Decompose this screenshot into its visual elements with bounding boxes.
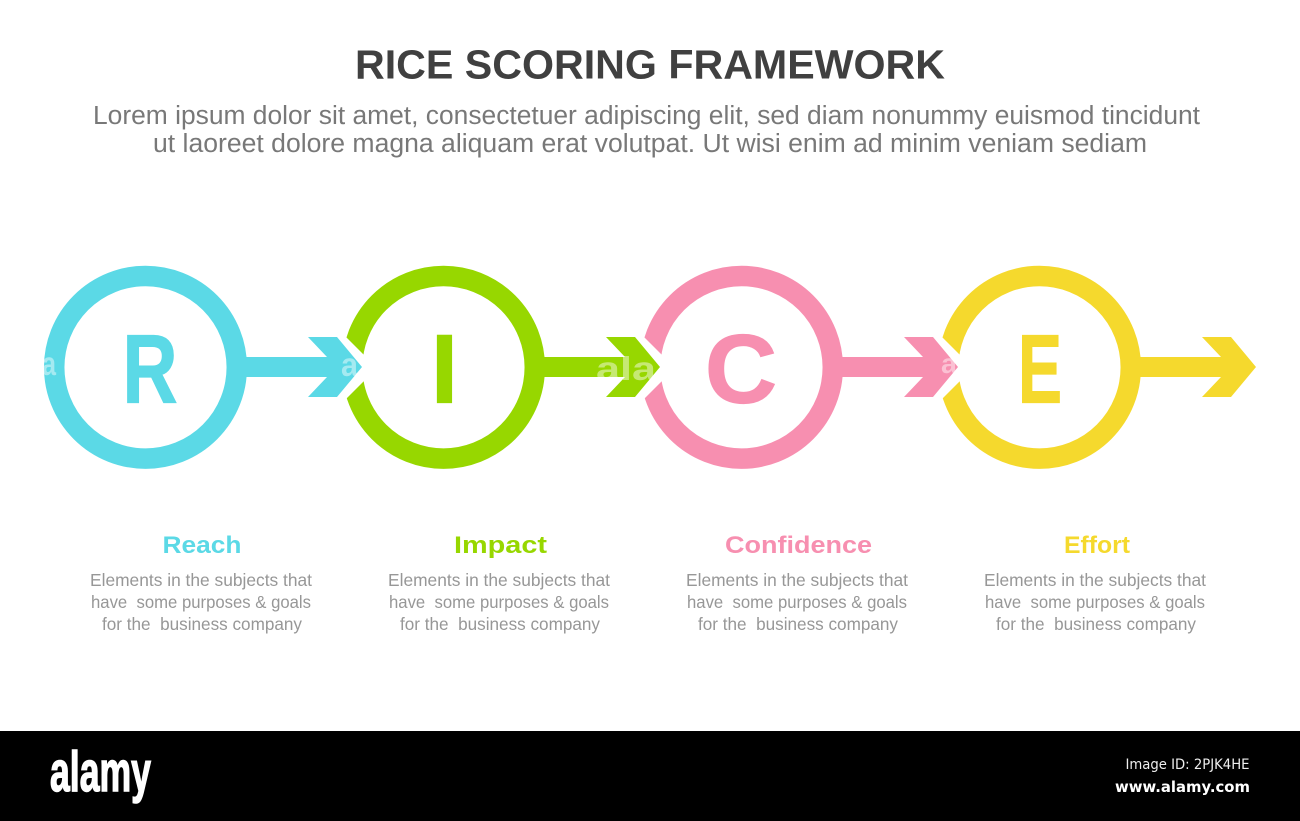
circle: Impact: I — [431, 314, 458, 424]
column: Impact: Impact — [454, 532, 547, 559]
watermark fragments: a — [341, 346, 359, 383]
column: Impact: Elements in the subjects that — [388, 570, 610, 590]
intro text — [93, 102, 1200, 158]
footer logo: alamy — [50, 740, 151, 804]
column: Confidence: Elements in the subjects that — [686, 570, 908, 590]
arrow: Confidence to Effort — [842, 337, 958, 397]
footer band — [0, 731, 1300, 821]
circle: Reach — [54, 276, 237, 459]
column: Impact — [388, 532, 610, 634]
circle: Confidence: C — [705, 314, 777, 424]
arrow: Reach to Impact — [246, 337, 362, 397]
column: Effort: for the business company — [996, 614, 1196, 634]
watermark fragments: a — [42, 345, 56, 382]
arrow: Impact to Confidence — [544, 337, 660, 397]
column: Effort: Elements in the subjects that — [984, 570, 1206, 590]
column: Effort: have some purposes & goals — [985, 592, 1205, 612]
column: Reach — [90, 532, 312, 634]
circle: Effort — [921, 276, 1131, 459]
circles row — [54, 276, 1131, 459]
column: Confidence: Confidence — [725, 532, 872, 559]
column: Confidence: for the business company — [698, 614, 898, 634]
column: Confidence: have some purposes & goals — [687, 592, 907, 612]
title: RICE SCORING FRAMEWORK — [355, 42, 945, 88]
watermark fragments — [42, 345, 957, 387]
footer url: www.alamy.com — [1115, 778, 1250, 796]
column: Reach: have some purposes & goals — [91, 592, 311, 612]
watermark fragments: ala — [596, 350, 657, 387]
circle: Reach: R — [122, 314, 178, 424]
circle: Confidence — [623, 276, 833, 459]
column: Impact: for the business company — [400, 614, 600, 634]
intro text: ut laoreet dolore magna aliquam erat volutpat. Ut wisi enim ad minim veniam sediam — [153, 130, 1147, 158]
intro text: Lorem ipsum dolor sit amet, consectetuer adipiscing elit, sed diam nonummy euismod tincidunt — [93, 102, 1200, 130]
column: Effort: Effort — [1064, 532, 1130, 559]
image id: Image ID: 2PJK4HE — [1126, 757, 1250, 773]
column: Impact: have some purposes & goals — [389, 592, 609, 612]
circle: Effort: E — [1018, 314, 1062, 424]
circle: Impact — [325, 276, 535, 459]
column: Confidence — [686, 532, 908, 634]
arrow: Effort outward — [1140, 337, 1256, 397]
column: Reach: for the business company — [102, 614, 302, 634]
column: Reach: Reach — [162, 532, 242, 559]
column: Reach: Elements in the subjects that — [90, 570, 312, 590]
watermark fragments: a — [941, 348, 957, 379]
column: Effort — [984, 532, 1206, 634]
